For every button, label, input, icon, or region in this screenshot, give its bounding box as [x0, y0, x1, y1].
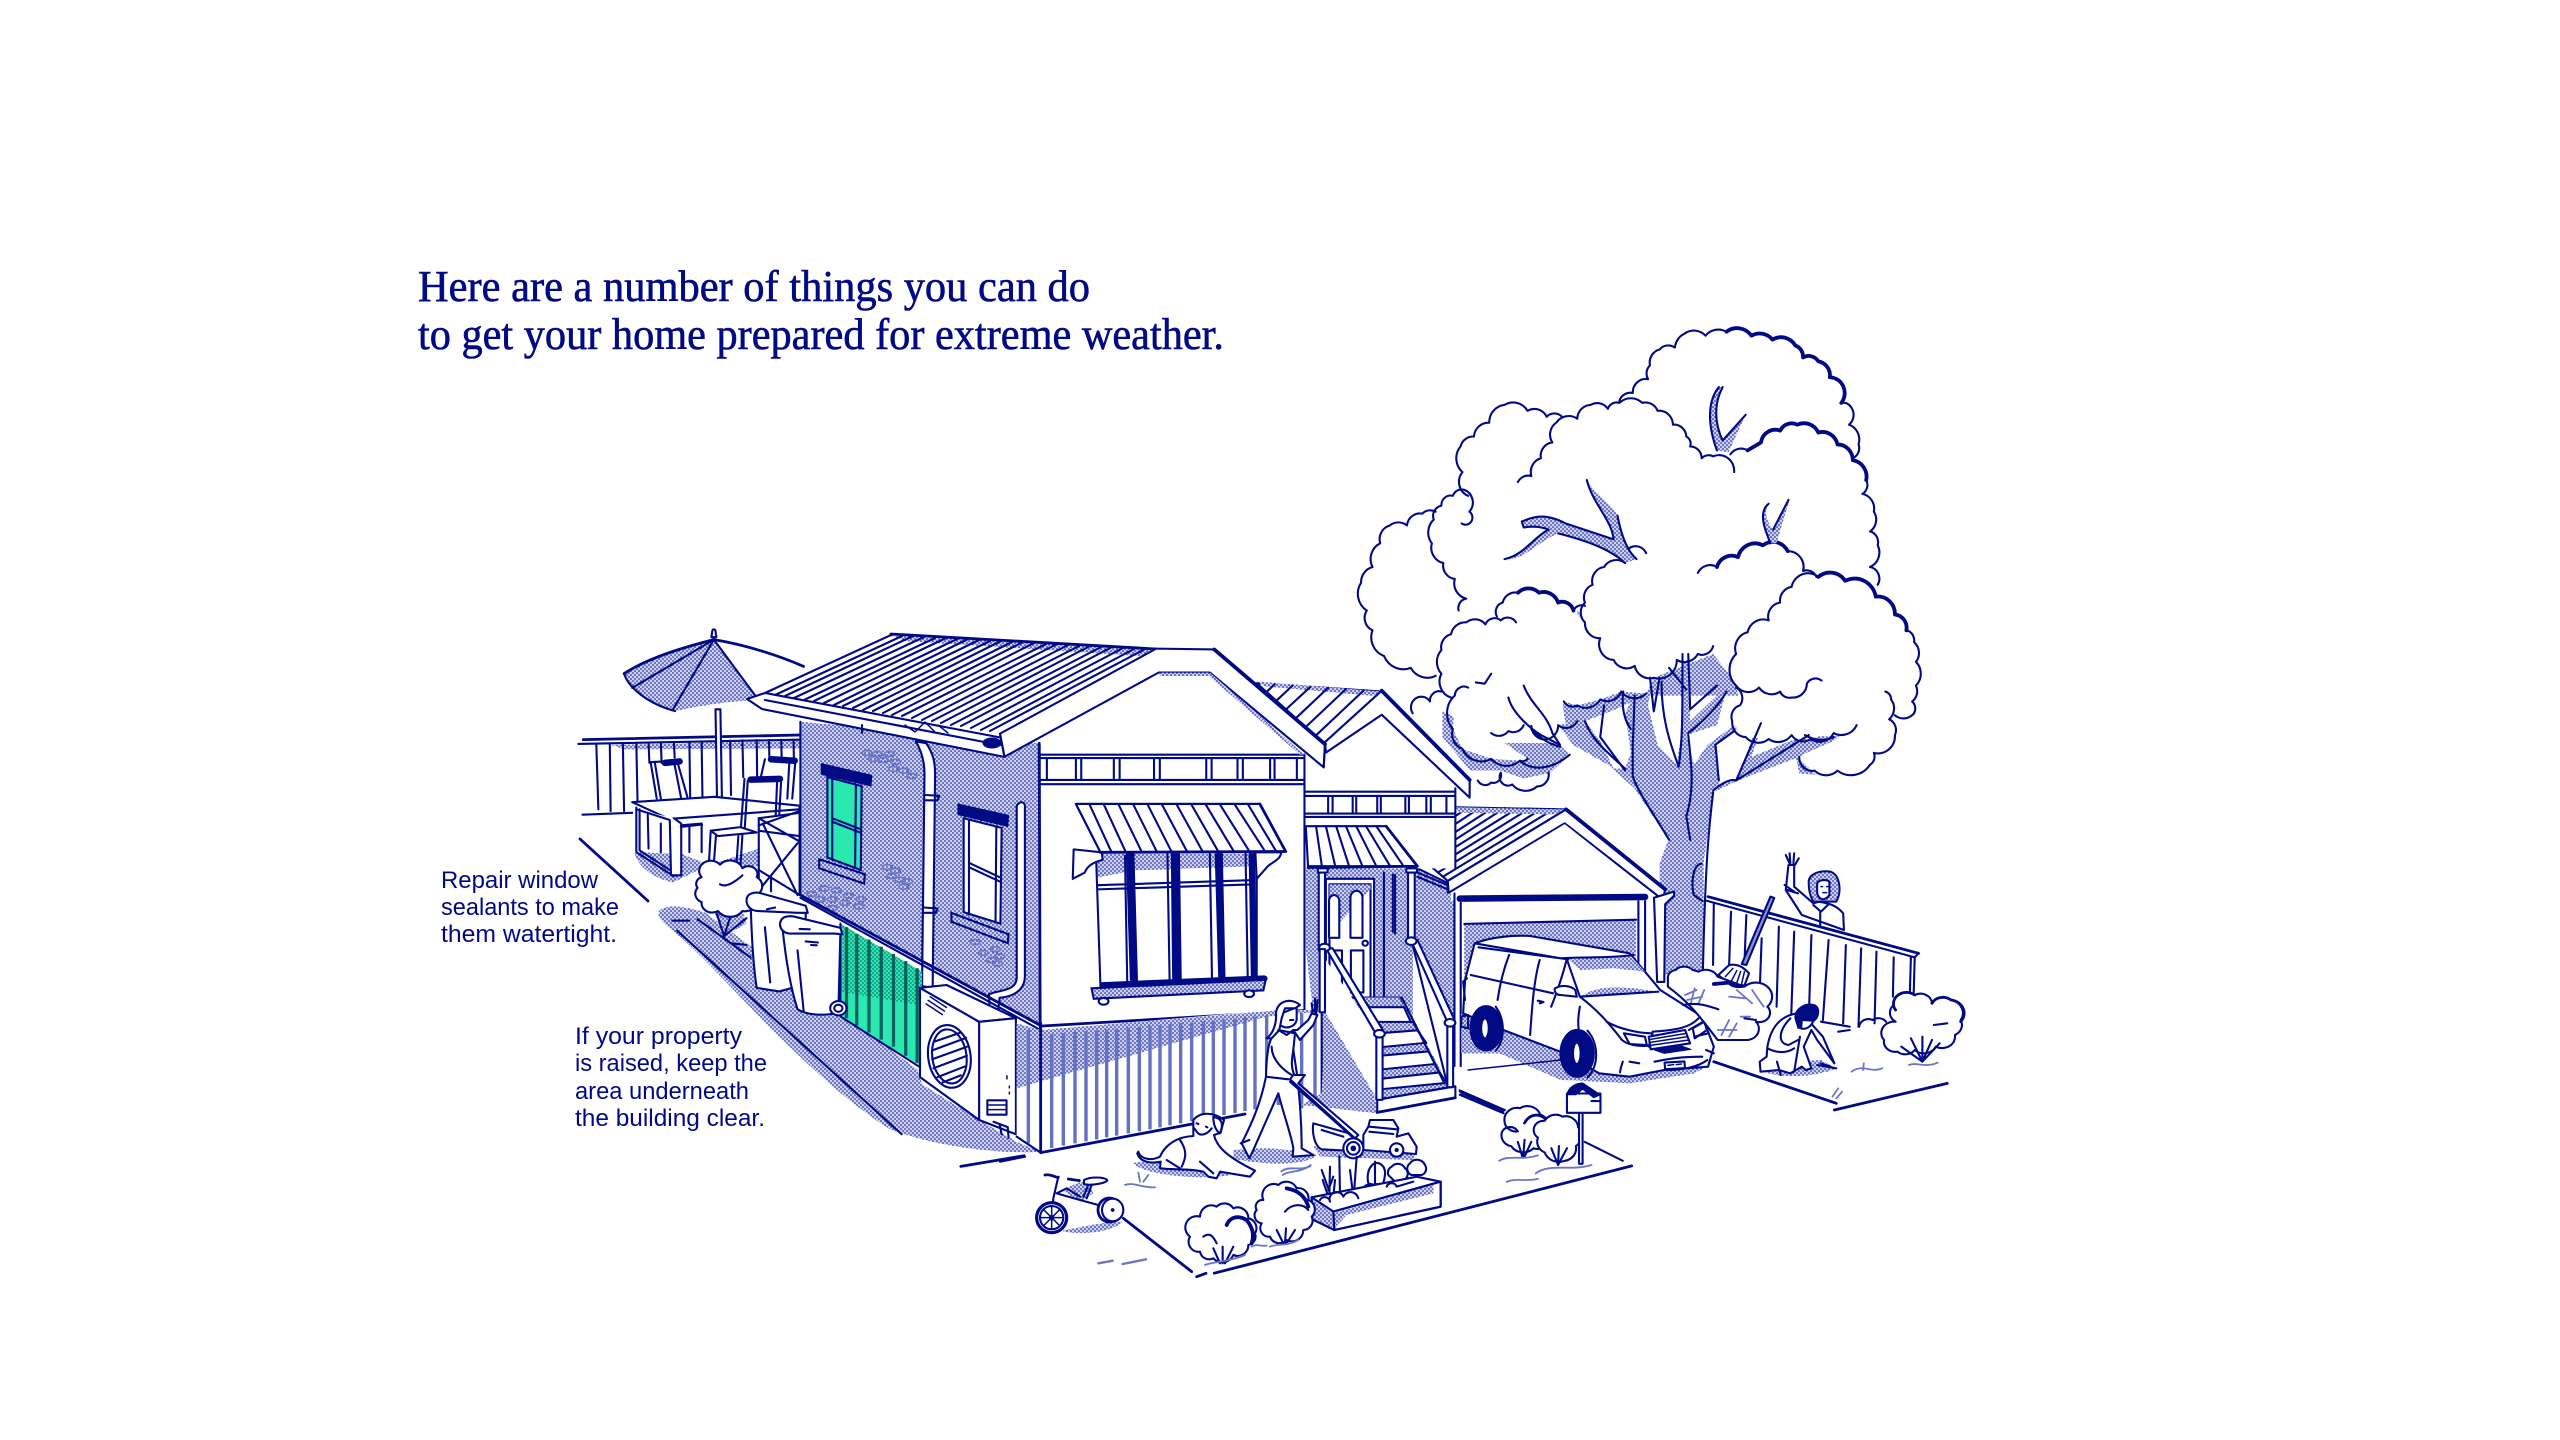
title: to get your home prepared for extreme weather. [418, 310, 1224, 359]
table shadow [634, 849, 759, 882]
shrubs behind [1668, 967, 1772, 1040]
neighbour fence, rake and waving neighbour [1459, 853, 1964, 1112]
lawn lines [1123, 1218, 1206, 1277]
tricycle [1037, 1175, 1123, 1233]
umbrella [624, 629, 804, 711]
canopy outlines [1358, 328, 1921, 791]
trellis panel [759, 811, 800, 895]
woman [1241, 998, 1363, 1158]
rake [1718, 897, 1774, 991]
front chair [709, 779, 781, 866]
callout line: window sealants [580, 839, 648, 901]
shrub right of gardener [1832, 992, 1964, 1098]
title: Here are a number of things you can do [418, 262, 1090, 311]
raised underfloor space (highlighted) [800, 898, 1040, 1066]
callout: repair window sealants [441, 867, 619, 948]
wall ledge [800, 895, 1040, 1025]
bay window [1096, 854, 1264, 986]
yard edge lines [1714, 1062, 1947, 1110]
porch roof [1306, 826, 1417, 867]
window sill [1092, 980, 1266, 1005]
bins [747, 893, 847, 1015]
callout: raised property [575, 1023, 767, 1132]
porch posts [1318, 868, 1448, 951]
kerb dashes [1098, 1259, 1146, 1264]
gutter [747, 693, 1005, 757]
garage roof [1404, 807, 1674, 1068]
tree [1358, 328, 1921, 974]
callout: raised property: area underneath [575, 1078, 749, 1105]
front shrubs [1125, 1165, 1315, 1265]
patio: umbrella, fence, table and chairs [578, 629, 804, 895]
callout: repair window sealants: Repair window [441, 867, 599, 894]
shrub beside bins [695, 860, 762, 936]
waving neighbour [1785, 853, 1844, 930]
callout: raised property: the building clear. [575, 1105, 765, 1132]
planter box [1312, 1157, 1441, 1230]
fence [578, 735, 800, 815]
main roof [747, 634, 1156, 757]
trunk lines [1585, 654, 1834, 974]
callout: raised property: If your property [575, 1023, 742, 1050]
car [1461, 936, 1714, 1083]
side wall of house [800, 722, 1040, 1027]
table [632, 797, 800, 876]
neighbouring gable and porch [1257, 681, 1470, 999]
woman mowing and dog [1037, 998, 1441, 1277]
main gable [1000, 649, 1325, 767]
back chair [651, 759, 796, 799]
car wheels [1461, 978, 1596, 1077]
mailbox [1567, 1083, 1600, 1164]
green window (highlighted) [819, 764, 872, 884]
under-floor battens [1000, 1010, 1377, 1162]
title [418, 262, 1224, 359]
downpipes [916, 741, 1025, 1013]
dog [1137, 1114, 1255, 1178]
crouching gardener [1760, 1004, 1836, 1076]
mailbox, shrubs and front lawn edge [1214, 1083, 1632, 1273]
brick patches [807, 750, 1005, 966]
callout: raised property: is raised, keep the [575, 1050, 767, 1077]
frieze [1040, 755, 1304, 784]
callout: repair window sealants: sealants to make [441, 894, 619, 921]
air conditioner [920, 985, 1016, 1138]
fence [1706, 897, 1919, 1027]
front stairs [1319, 937, 1455, 1112]
house front [1039, 673, 1313, 1035]
lawn mower [1313, 1120, 1417, 1160]
awning [1073, 804, 1286, 879]
front door [1326, 873, 1395, 999]
branches [1505, 387, 1790, 768]
garage [1306, 807, 1674, 1100]
handrails [1319, 937, 1455, 1100]
ground shadow [659, 907, 1040, 1166]
right side window [951, 804, 1009, 943]
callout: repair window sealants: them watertight. [441, 921, 617, 948]
umbrella pole [716, 709, 722, 806]
